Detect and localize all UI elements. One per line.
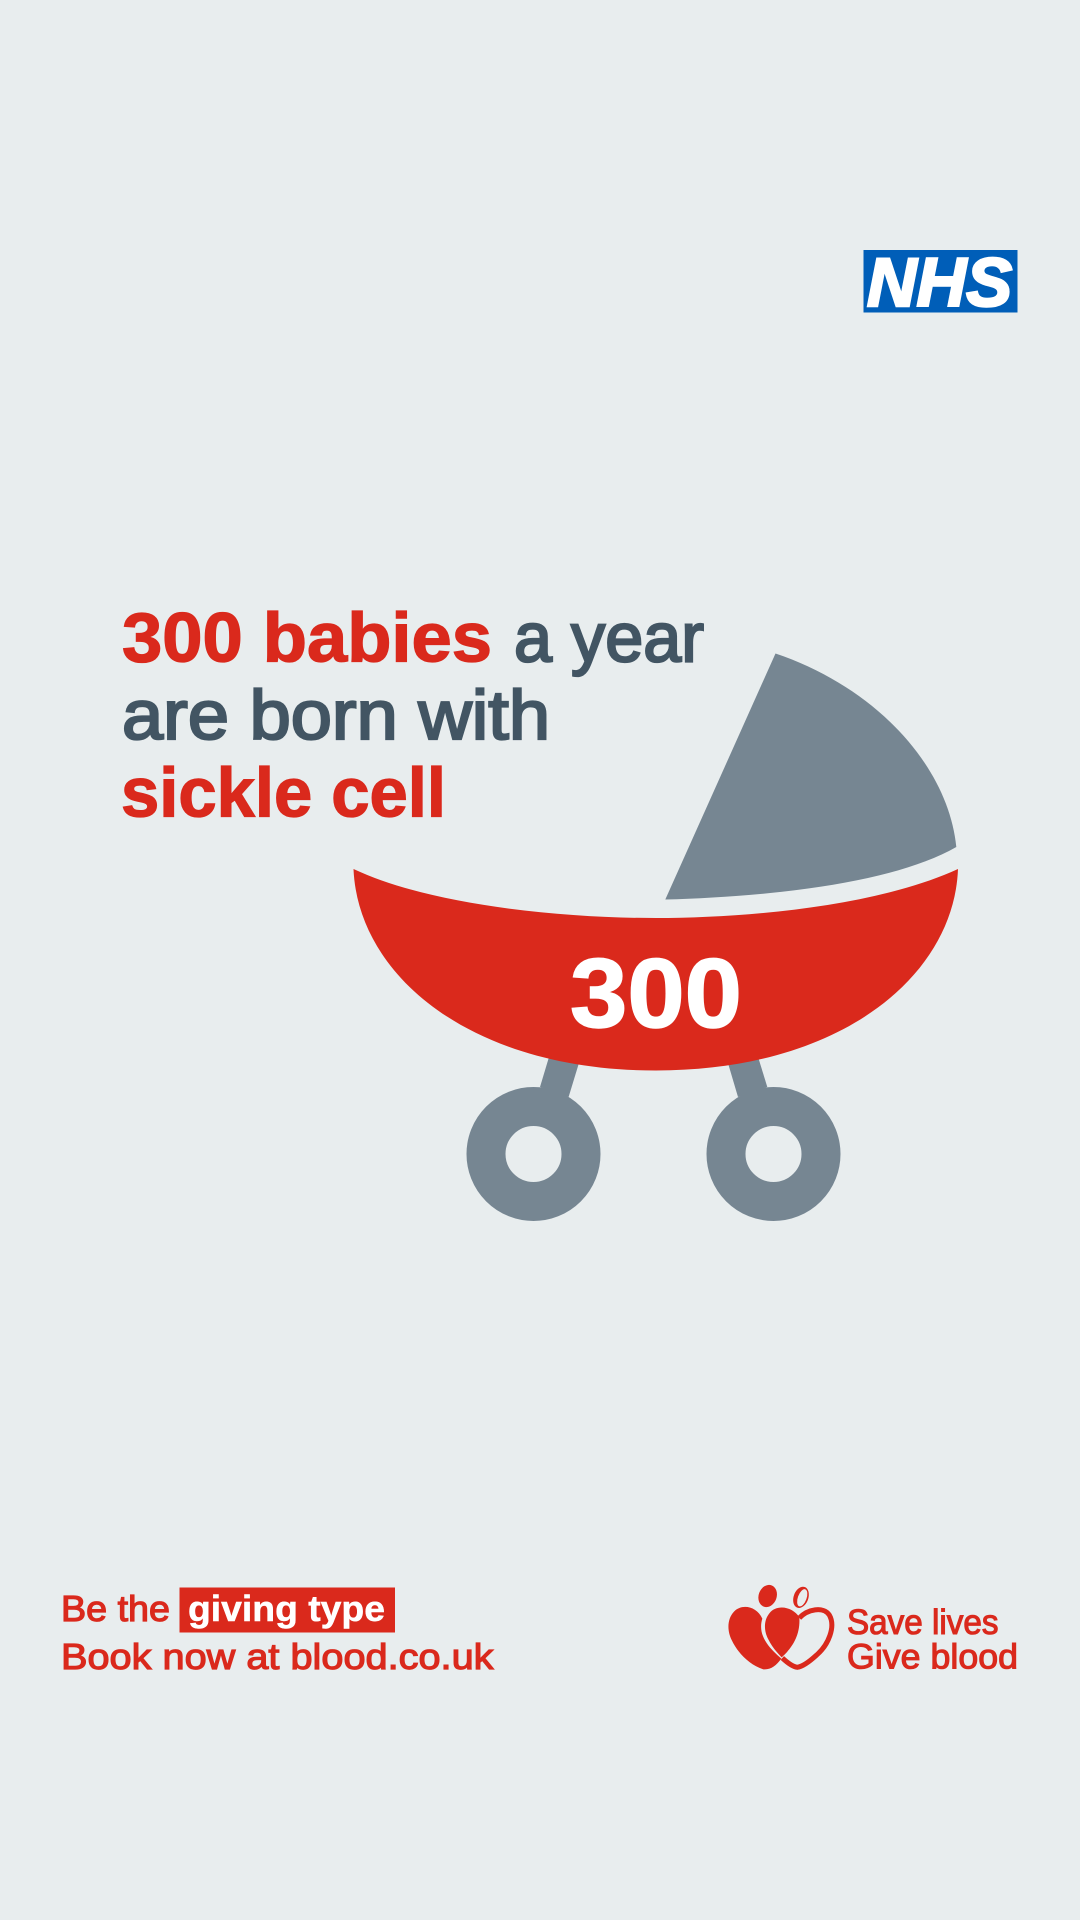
call to action <box>61 1588 495 1677</box>
icon: baby pram <box>354 654 958 1202</box>
icon: hearts <box>728 1582 832 1669</box>
highlighted tag: giving type: giving type <box>188 1588 385 1629</box>
call to action: Be the <box>61 1588 170 1629</box>
heading <box>121 598 704 832</box>
call to action: Book now at blood.co.uk <box>61 1636 495 1677</box>
heading: sickle cell <box>121 754 446 832</box>
heading: a year <box>514 598 704 676</box>
logo: NHS: NHS <box>867 244 1012 321</box>
number on pram: 300 <box>570 938 742 1048</box>
logo: Save lives Give blood <box>728 1582 1018 1676</box>
right outline heart <box>782 1610 832 1667</box>
pram wheels and legs <box>486 1047 821 1202</box>
heading: are born with <box>122 676 550 754</box>
logo: Save lives Give blood: Give blood <box>847 1638 1018 1676</box>
left solid heart <box>728 1607 781 1669</box>
middle solid heart <box>765 1608 799 1657</box>
logo: Save lives Give blood: Save lives <box>847 1603 998 1642</box>
heading: 300 babies <box>122 598 492 676</box>
pram body <box>354 869 958 1070</box>
blood drop <box>790 1584 812 1610</box>
head <box>755 1582 780 1610</box>
pram hood <box>665 654 956 900</box>
